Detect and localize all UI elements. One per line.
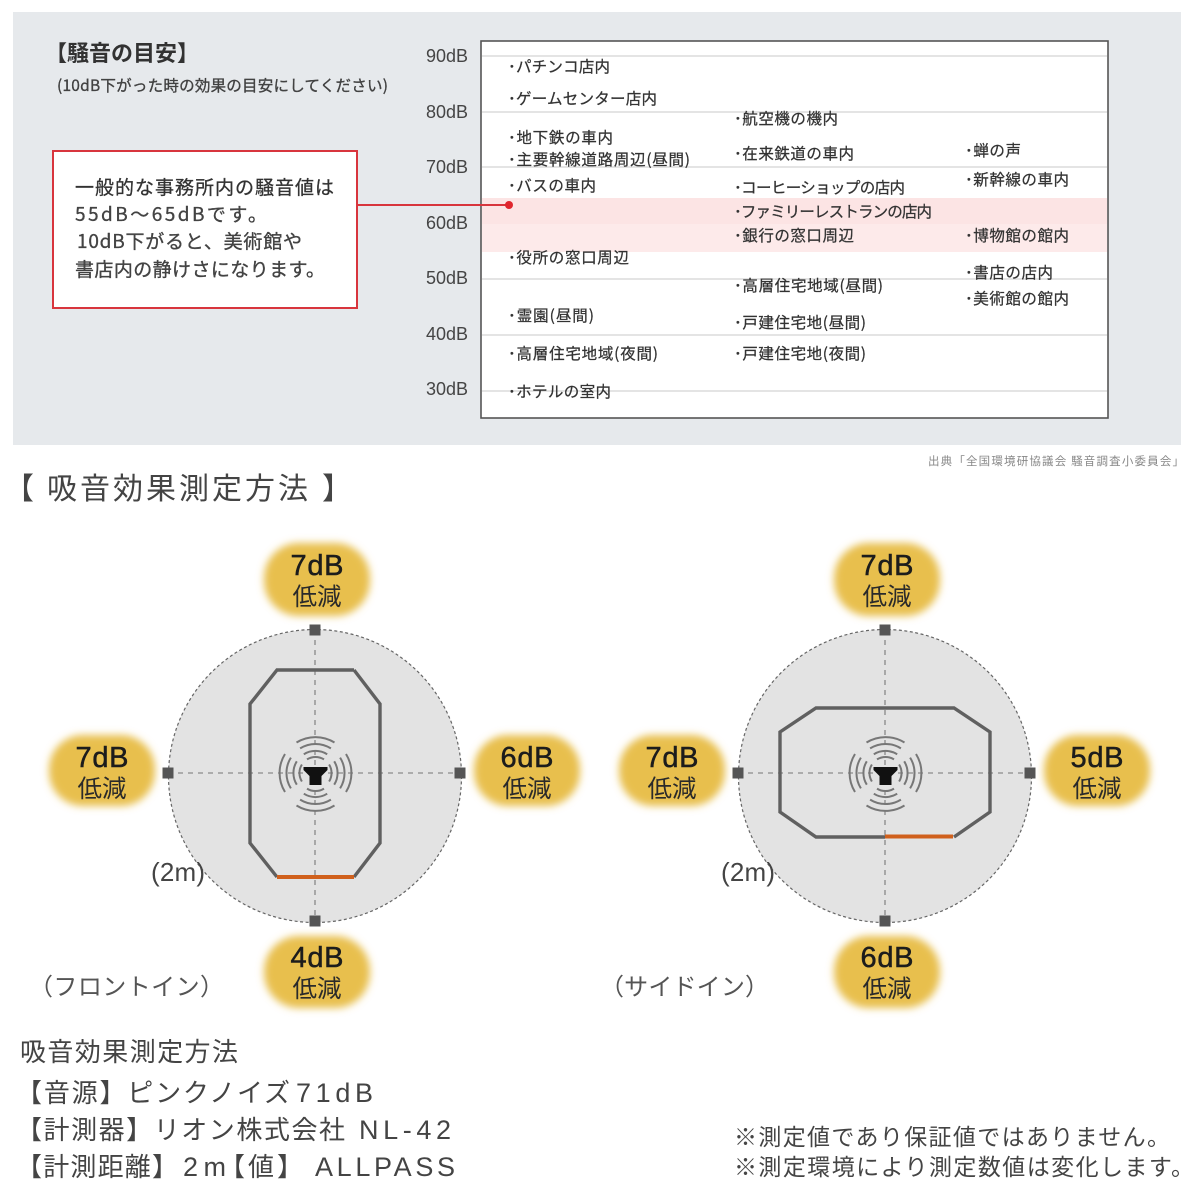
chart: noise levels table: ･コーヒーショップの店内 (734, 176, 905, 198)
chart: noise levels table: ･高層住宅地域(昼間) (734, 274, 883, 296)
chart: noise levels table: ･ゲームセンター店内 (508, 87, 657, 109)
subheading: guide note: (10dB下がった時の効果の目安にしてください) (57, 74, 388, 96)
chart: noise levels table: ･役所の窓口周辺 (508, 246, 629, 268)
callout: typical office noise: 10dB下がると、美術館や (77, 227, 302, 254)
badge: left 7dB: 低減 (648, 770, 696, 805)
badge: bottom 4dB: 4dB (290, 942, 344, 974)
icon: speaker with sound waves (280, 737, 351, 811)
source credit: 出典「全国環境研協議会 騒音調査小委員会」 (928, 453, 1184, 469)
measurement points (732, 624, 1036, 926)
chart: noise levels table: ･霊園(昼間) (508, 304, 594, 326)
text block: measurement conditions: 【音源】ピンクノイズ (16, 1073, 290, 1110)
badge: left 7dB: 7dB (646, 742, 698, 774)
distance label: (2m) (151, 857, 205, 887)
badge: bottom 4dB: 低減 (292, 970, 342, 1005)
text block: measurement conditions: 2m (183, 1152, 226, 1182)
chart: noise levels table: ･在来鉄道の車内 (734, 142, 854, 164)
badge: top 7dB: 7dB (290, 550, 344, 582)
callout: typical office noise: 55dB～65dBです。 (75, 200, 267, 227)
text block: measurement conditions: 71dB (296, 1078, 373, 1108)
decibel axis labels (426, 46, 468, 399)
badge: bottom 6dB: 低減 (862, 970, 912, 1005)
badge: top 7dB: 低減 (862, 578, 912, 613)
decibel axis labels: 80dB (426, 102, 468, 122)
chart: noise levels table: ･パチンコ店内 (508, 55, 610, 77)
chart: noise levels table: ･航空機の機内 (734, 107, 838, 129)
chart: noise levels table: ･主要幹線道路周辺(昼間) (508, 148, 690, 170)
chart: noise levels table: ･戸建住宅地(昼間) (734, 311, 866, 333)
badge: right 6dB: 6dB (500, 742, 554, 774)
chart: noise levels table: ･バスの車内 (508, 174, 596, 196)
measurement circle (168, 630, 462, 922)
diagram: front-in (29, 543, 580, 1008)
badge: right 5dB (1044, 735, 1150, 806)
opening highlight (885, 834, 953, 838)
chart: noise levels table: ･ファミリーレストランの店内 (734, 200, 932, 222)
text block: measurement conditions: 【計測器】リオン株式会社 (16, 1110, 345, 1147)
opening highlight (277, 875, 354, 879)
heading: measurement method: 】 (322, 464, 352, 508)
chart: noise levels table: ･ホテルの室内 (508, 380, 611, 402)
callout: typical office noise: 一般的な事務所内の騒音値は (75, 173, 334, 200)
badge: bottom 4dB (264, 936, 370, 1008)
text block: measurement conditions: ALLPASS (315, 1152, 455, 1182)
chart: noise levels table: ･地下鉄の車内 (508, 126, 613, 148)
panel: noise guide (13, 12, 1181, 445)
chamber outline (780, 708, 990, 837)
badge: right 6dB: 低減 (502, 770, 552, 805)
measurement circle (738, 630, 1032, 922)
chart: noise levels table: ･博物館の館内 (965, 224, 1069, 246)
decibel axis labels: 50dB (426, 268, 468, 288)
text block: measurement conditions: 吸音効果測定方法 (20, 1032, 238, 1069)
badge: left 7dB (49, 735, 155, 806)
badge: right 5dB: 5dB (1070, 742, 1124, 774)
badge: top 7dB: 7dB (860, 550, 914, 582)
callout: typical office noise: 書店内の静けさになります。 (75, 255, 325, 282)
heading: measurement method: 【 (4, 464, 34, 508)
badge: left 7dB: 低減 (78, 770, 126, 805)
text block: measurement conditions: 【計測距離】 (16, 1147, 178, 1184)
decibel axis labels: 90dB (426, 46, 468, 66)
text block: measurement conditions (16, 1032, 455, 1184)
badge: bottom 6dB: 6dB (860, 942, 914, 974)
badge: left 7dB (619, 735, 725, 806)
diagram: side-in (600, 543, 1150, 1008)
badge: left 7dB: 7dB (76, 742, 128, 774)
decibel axis labels: 30dB (426, 379, 468, 399)
decibel axis labels: 70dB (426, 157, 468, 177)
icon: speaker with sound waves (850, 737, 921, 811)
decibel axis labels: 40dB (426, 324, 468, 344)
text block: measurement conditions: NL-42 (359, 1115, 451, 1145)
text block: disclaimers: ※測定値であり保証値ではありません。 (734, 1118, 1170, 1152)
chart: noise levels table: ･銀行の窓口周辺 (734, 224, 854, 246)
chamber outline (250, 670, 380, 877)
badge: right 5dB: 低減 (1072, 770, 1122, 805)
text block: disclaimers: ※測定環境により測定数値は変化します。 (734, 1148, 1194, 1182)
caption: front-in: （フロントイン） (29, 967, 224, 1002)
chart: noise levels table: ･戸建住宅地(夜間) (734, 342, 866, 364)
badge: right 6dB (474, 735, 580, 806)
chart: noise levels table: ･高層住宅地域(夜間) (508, 342, 658, 364)
distance label: (2m) (721, 857, 775, 887)
heading: noise guide: 【騒音の目安】 (45, 36, 199, 68)
text block: measurement conditions: 【値】 (219, 1147, 303, 1184)
chart: noise levels table: ･新幹線の車内 (965, 168, 1069, 190)
decibel axis labels: 60dB (426, 213, 468, 233)
chart: noise levels table: ･蝉の声 (965, 139, 1021, 161)
badge: top 7dB (264, 543, 370, 616)
arrow: callout connector (357, 201, 513, 209)
heading: measurement method: 吸音効果測定方法 (47, 464, 308, 508)
chart: noise levels table (481, 41, 1108, 418)
text block: disclaimers (734, 1118, 1194, 1182)
badge: top 7dB (834, 543, 940, 616)
badge: top 7dB: 低減 (292, 578, 342, 613)
callout: typical office noise (53, 151, 357, 308)
badge: bottom 6dB (834, 936, 940, 1008)
caption: side-in: （サイドイン） (600, 967, 769, 1002)
chart: noise levels table: ･美術館の館内 (965, 287, 1069, 309)
chart: noise levels table: ･書店の店内 (965, 261, 1053, 283)
measurement points (162, 624, 466, 926)
